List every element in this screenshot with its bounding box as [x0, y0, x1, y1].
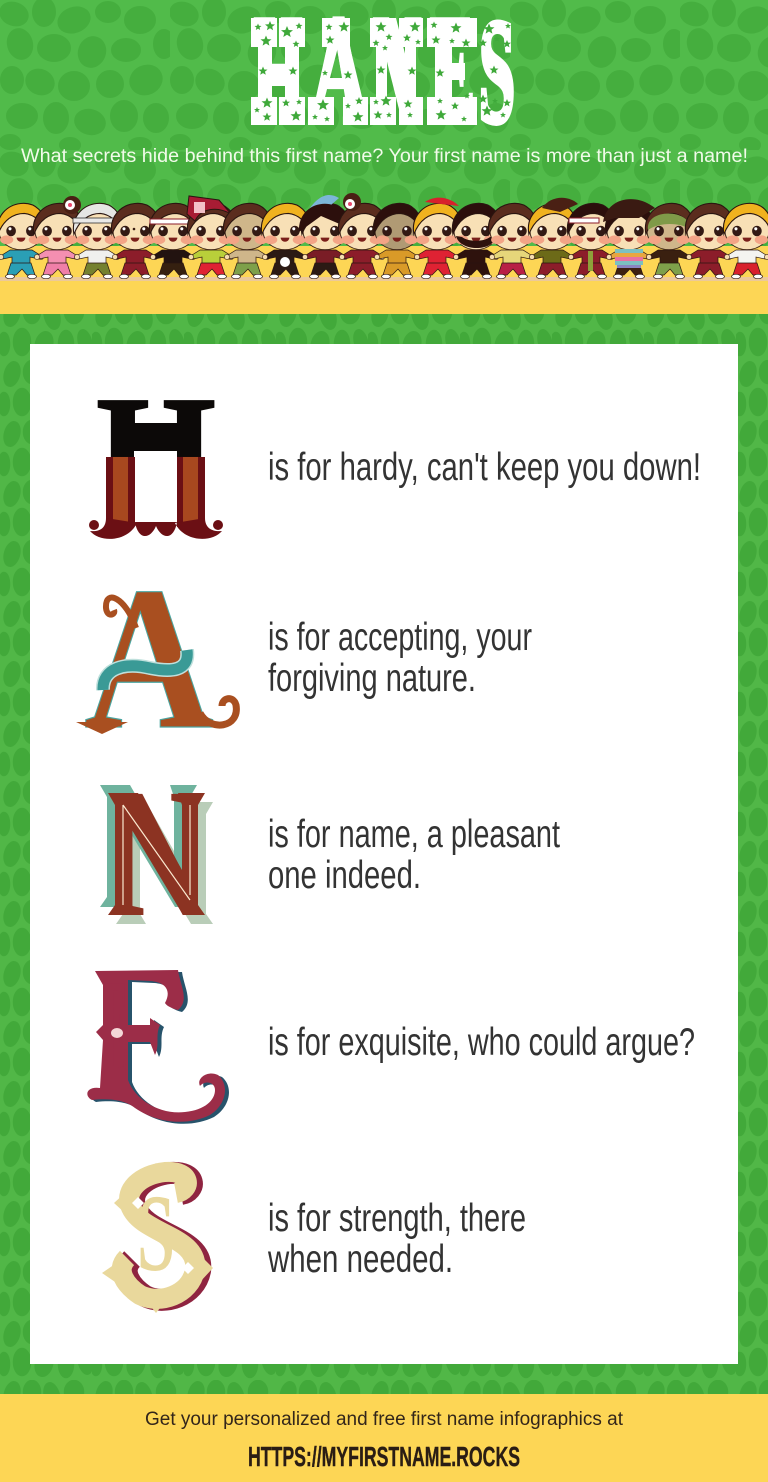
text: N lines [268, 813, 560, 897]
title stars [254, 21, 511, 122]
green background top [0, 0, 768, 314]
text: N lines: one indeed. [268, 854, 421, 897]
footer url: HTTPS://MYFIRSTNAME.ROCKS [248, 1441, 520, 1472]
letter N: N [112, 751, 202, 956]
text: S lines: is for strength, there [268, 1197, 526, 1240]
text: N lines: is for name, a pleasant [268, 813, 560, 856]
green background lower [0, 314, 768, 1394]
text: A lines: is for accepting, your [268, 616, 532, 659]
footer band [0, 1394, 768, 1482]
text: A lines [268, 616, 532, 700]
letter H: H [95, 350, 217, 585]
footer text: Get your personalized and free first name infographics at [145, 1409, 624, 1430]
yellow band behind characters [0, 246, 768, 314]
letter E [87, 951, 229, 1124]
white content panel [30, 344, 738, 1364]
letter S: S [137, 1172, 175, 1294]
letter A: A [84, 545, 214, 772]
subtitle: What secrets hide behind this first name? Your first name is more than just a name! [21, 146, 748, 167]
text: A lines: forgiving nature. [268, 657, 476, 700]
text: S lines: when needed. [267, 1238, 453, 1281]
title [251, 0, 515, 158]
letter S [102, 1163, 213, 1313]
row of cartoon characters [0, 193, 768, 279]
letter E: E [104, 951, 128, 1106]
text: S lines [267, 1197, 526, 1281]
letter N [100, 751, 213, 956]
